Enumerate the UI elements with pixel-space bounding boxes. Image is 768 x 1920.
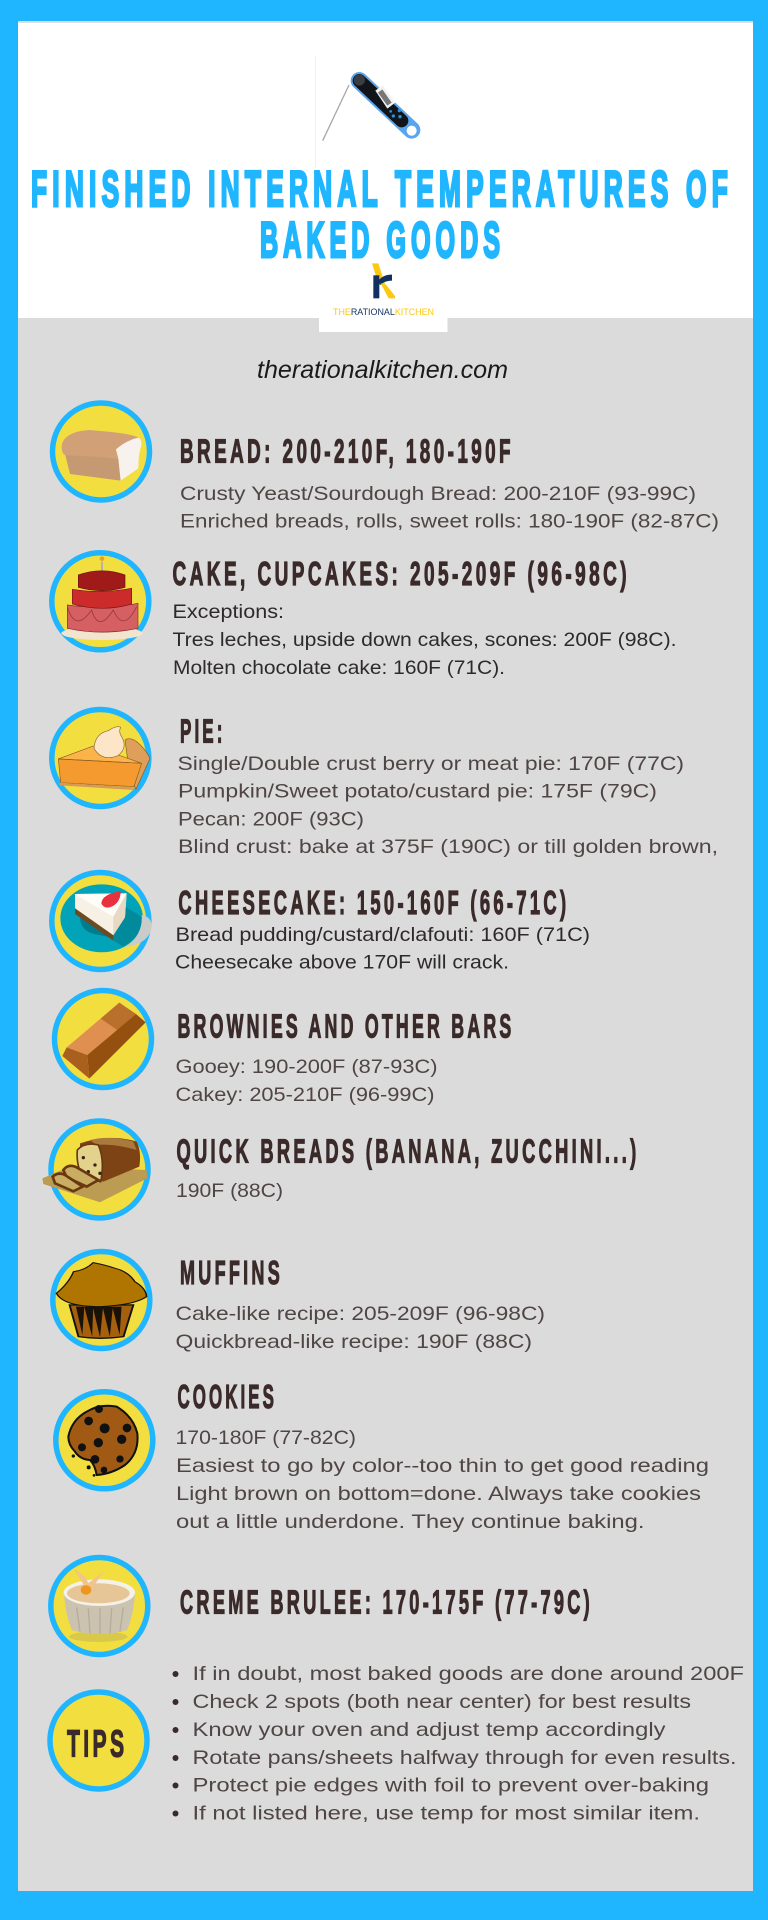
text: cookie notes: out a little underdone. They continue baking. <box>176 1511 644 1533</box>
text: muffin temperatures <box>176 1303 545 1353</box>
header panel <box>18 21 753 332</box>
text: muffin temperatures: Cake-like recipe: 205-209F (96-98C) <box>176 1303 545 1325</box>
panel: creme brulee <box>51 1558 593 1654</box>
icon: layered cake <box>52 553 149 650</box>
panel: cookies <box>56 1378 709 1533</box>
text: bread temperatures <box>180 483 719 532</box>
text: bread temperatures: Crusty Yeast/Sourdough Bread: 200-210F (93-99C) <box>180 483 696 505</box>
icon: slice of pumpkin pie <box>52 710 150 806</box>
logo: The Rational Kitchen <box>319 262 448 332</box>
text: cheesecake notes: Bread pudding/custard/clafouti: 160F (71C) <box>176 924 590 946</box>
text: cake exceptions <box>172 601 676 679</box>
bullet list: tips: If not listed here, use temp for most similar item. <box>192 1802 700 1824</box>
panel: brownies <box>54 990 514 1106</box>
content panel background <box>18 318 753 1891</box>
icon: brownie bar <box>54 990 152 1088</box>
text: cake exceptions: Exceptions: <box>172 601 284 623</box>
text: pie temperatures: Pumpkin/Sweet potato/custard pie: 175F (79C) <box>178 780 657 802</box>
icon: tips badge: TIPS <box>67 1724 128 1766</box>
text: brownie temperatures <box>176 1056 438 1106</box>
text: pie temperatures <box>178 753 718 858</box>
text: cookie notes: Light brown on bottom=done. Always take cookies <box>176 1483 701 1505</box>
panel: muffins <box>53 1252 545 1353</box>
panel: quick breads <box>42 1121 640 1218</box>
title <box>31 161 733 268</box>
text: brownie temperatures: Gooey: 190-200F (87-93C) <box>176 1056 438 1078</box>
icon: tips badge <box>50 1692 147 1789</box>
text: cookie notes <box>176 1427 709 1533</box>
text: pie temperatures: Pecan: 200F (93C) <box>178 808 364 830</box>
icon: cheesecake slice on plate <box>52 872 152 970</box>
bullet list: tips: Check 2 spots (both near center) for best results <box>192 1691 691 1713</box>
text: cheesecake notes: Cheesecake above 170F will crack. <box>175 952 509 974</box>
text: pie temperatures: Single/Double crust berry or meat pie: 170F (77C) <box>178 753 684 775</box>
bullet list: tips: Rotate pans/sheets halfway through for even results. <box>192 1747 736 1769</box>
text: brownie temperatures: Cakey: 205-210F (96-99C) <box>176 1084 434 1106</box>
panel: bread <box>52 403 719 532</box>
panel: pie <box>52 710 718 858</box>
title: BAKED GOODS <box>260 212 505 268</box>
text: cookie notes: Easiest to go by color--too thin to get good reading <box>176 1455 709 1477</box>
icon: loaf of bread <box>52 403 150 500</box>
text: cake exceptions: Molten chocolate cake: 160F (71C). <box>173 657 505 679</box>
text: quick bread temperature: 190F (88C) <box>176 1180 283 1202</box>
bullet list: tips: Know your oven and adjust temp accordingly <box>192 1719 666 1741</box>
bullet list: tips <box>172 1663 744 1824</box>
heading: cookies: COOKIES <box>178 1378 277 1415</box>
text: pie temperatures: Blind crust: bake at 375F (190C) or till golden brown, <box>178 836 718 858</box>
heading: pie: PIE: <box>180 712 226 750</box>
icon: muffin <box>53 1252 150 1348</box>
logo: The Rational Kitchen: THERATIONALKITCHEN <box>333 307 434 318</box>
text: bread temperatures: Enriched breads, rolls, sweet rolls: 180-190F (82-87C) <box>180 510 719 532</box>
bullet list: tips: Protect pie edges with foil to prevent over-baking <box>192 1774 709 1796</box>
heading: bread: BREAD: 200-210F, 180-190F <box>180 432 514 470</box>
text: cake exceptions: Tres leches, upside down cakes, scones: 200F (98C). <box>172 629 676 651</box>
panel: tips <box>50 1663 744 1824</box>
icon: instant-read thermometer <box>323 74 417 141</box>
icon: creme brulee ramekin <box>51 1558 148 1654</box>
website URL: therationalkitchen.com <box>257 356 508 384</box>
icon: sliced quick bread on board <box>42 1121 148 1218</box>
panel: cake <box>52 553 677 679</box>
text: cookie notes: 170-180F (77-82C) <box>176 1427 356 1449</box>
text: muffin temperatures: Quickbread-like recipe: 190F (88C) <box>176 1331 532 1353</box>
icon: bitten chocolate chip cookie <box>56 1392 153 1489</box>
heading: muffins: MUFFINS <box>180 1254 283 1291</box>
text: cheesecake notes <box>175 924 590 974</box>
panel: cheesecake <box>52 872 590 974</box>
bullet list: tips: If in doubt, most baked goods are done around 200F <box>192 1663 744 1685</box>
